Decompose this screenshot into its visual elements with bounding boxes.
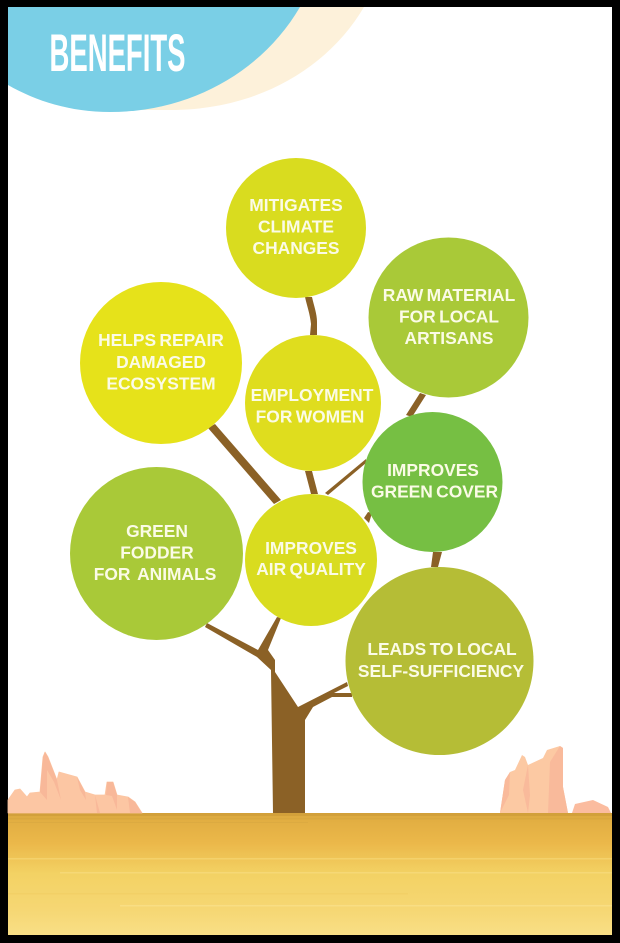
- circle: mitigates climate changes: CLIMATE: [258, 216, 334, 236]
- header swoosh: blue: [8, 7, 300, 112]
- circle: mitigates climate changes: [226, 158, 366, 298]
- circle: raw material for local artisans: FOR LOCAL: [399, 306, 499, 326]
- circle: raw material for local artisans: ARTISANS: [405, 328, 493, 348]
- circle: leads to local self-sufficiency: SELF-SUFFICIENCY: [358, 661, 524, 681]
- circle: helps repair damaged ecosystem: ECOSYSTEM: [106, 374, 216, 394]
- circle: mitigates climate changes: MITIGATES: [249, 195, 343, 215]
- circle: improves green cover: GREEN COVER: [371, 482, 498, 502]
- circle: green fodder for animals: [70, 467, 243, 640]
- circle: employment for women: FOR WOMEN: [256, 406, 364, 426]
- circle: raw material for local artisans: RAW MATERIAL: [383, 285, 516, 305]
- circle: improves air quality: IMPROVES: [265, 538, 357, 558]
- circle: improves green cover: [362, 412, 502, 552]
- header swoosh: cream: [140, 7, 364, 110]
- circle: raw material for local artisans: [368, 238, 528, 398]
- title: BENEFITS: [50, 24, 186, 83]
- ground: desert sand: [8, 813, 612, 935]
- circle: green fodder for animals: FODDER: [120, 542, 194, 562]
- circle: mitigates climate changes: CHANGES: [253, 238, 339, 258]
- circle: helps repair damaged ecosystem: DAMAGED: [116, 352, 206, 372]
- tree trunk and lower branches: [205, 617, 352, 813]
- circle: improves air quality: AIR QUALITY: [256, 559, 366, 579]
- circle: green fodder for animals: FOR ANIMALS: [94, 564, 216, 584]
- branches linking circles: [208, 297, 442, 567]
- circle: leads to local self-sufficiency: LEADS TO LOCAL: [367, 639, 517, 659]
- circle: improves green cover: IMPROVES: [387, 460, 479, 480]
- rock formation: right: [500, 746, 611, 813]
- circle: green fodder for animals: GREEN: [126, 521, 188, 541]
- circle: improves air quality: [245, 494, 377, 626]
- circle: helps repair damaged ecosystem: HELPS REPAIR: [98, 330, 224, 350]
- circle: employment for women: [245, 335, 381, 471]
- circle: leads to local self-sufficiency: [346, 567, 534, 755]
- circle: employment for women: EMPLOYMENT: [251, 385, 374, 405]
- rock formation: left: [8, 752, 142, 813]
- circle: helps repair damaged ecosystem: [80, 282, 242, 444]
